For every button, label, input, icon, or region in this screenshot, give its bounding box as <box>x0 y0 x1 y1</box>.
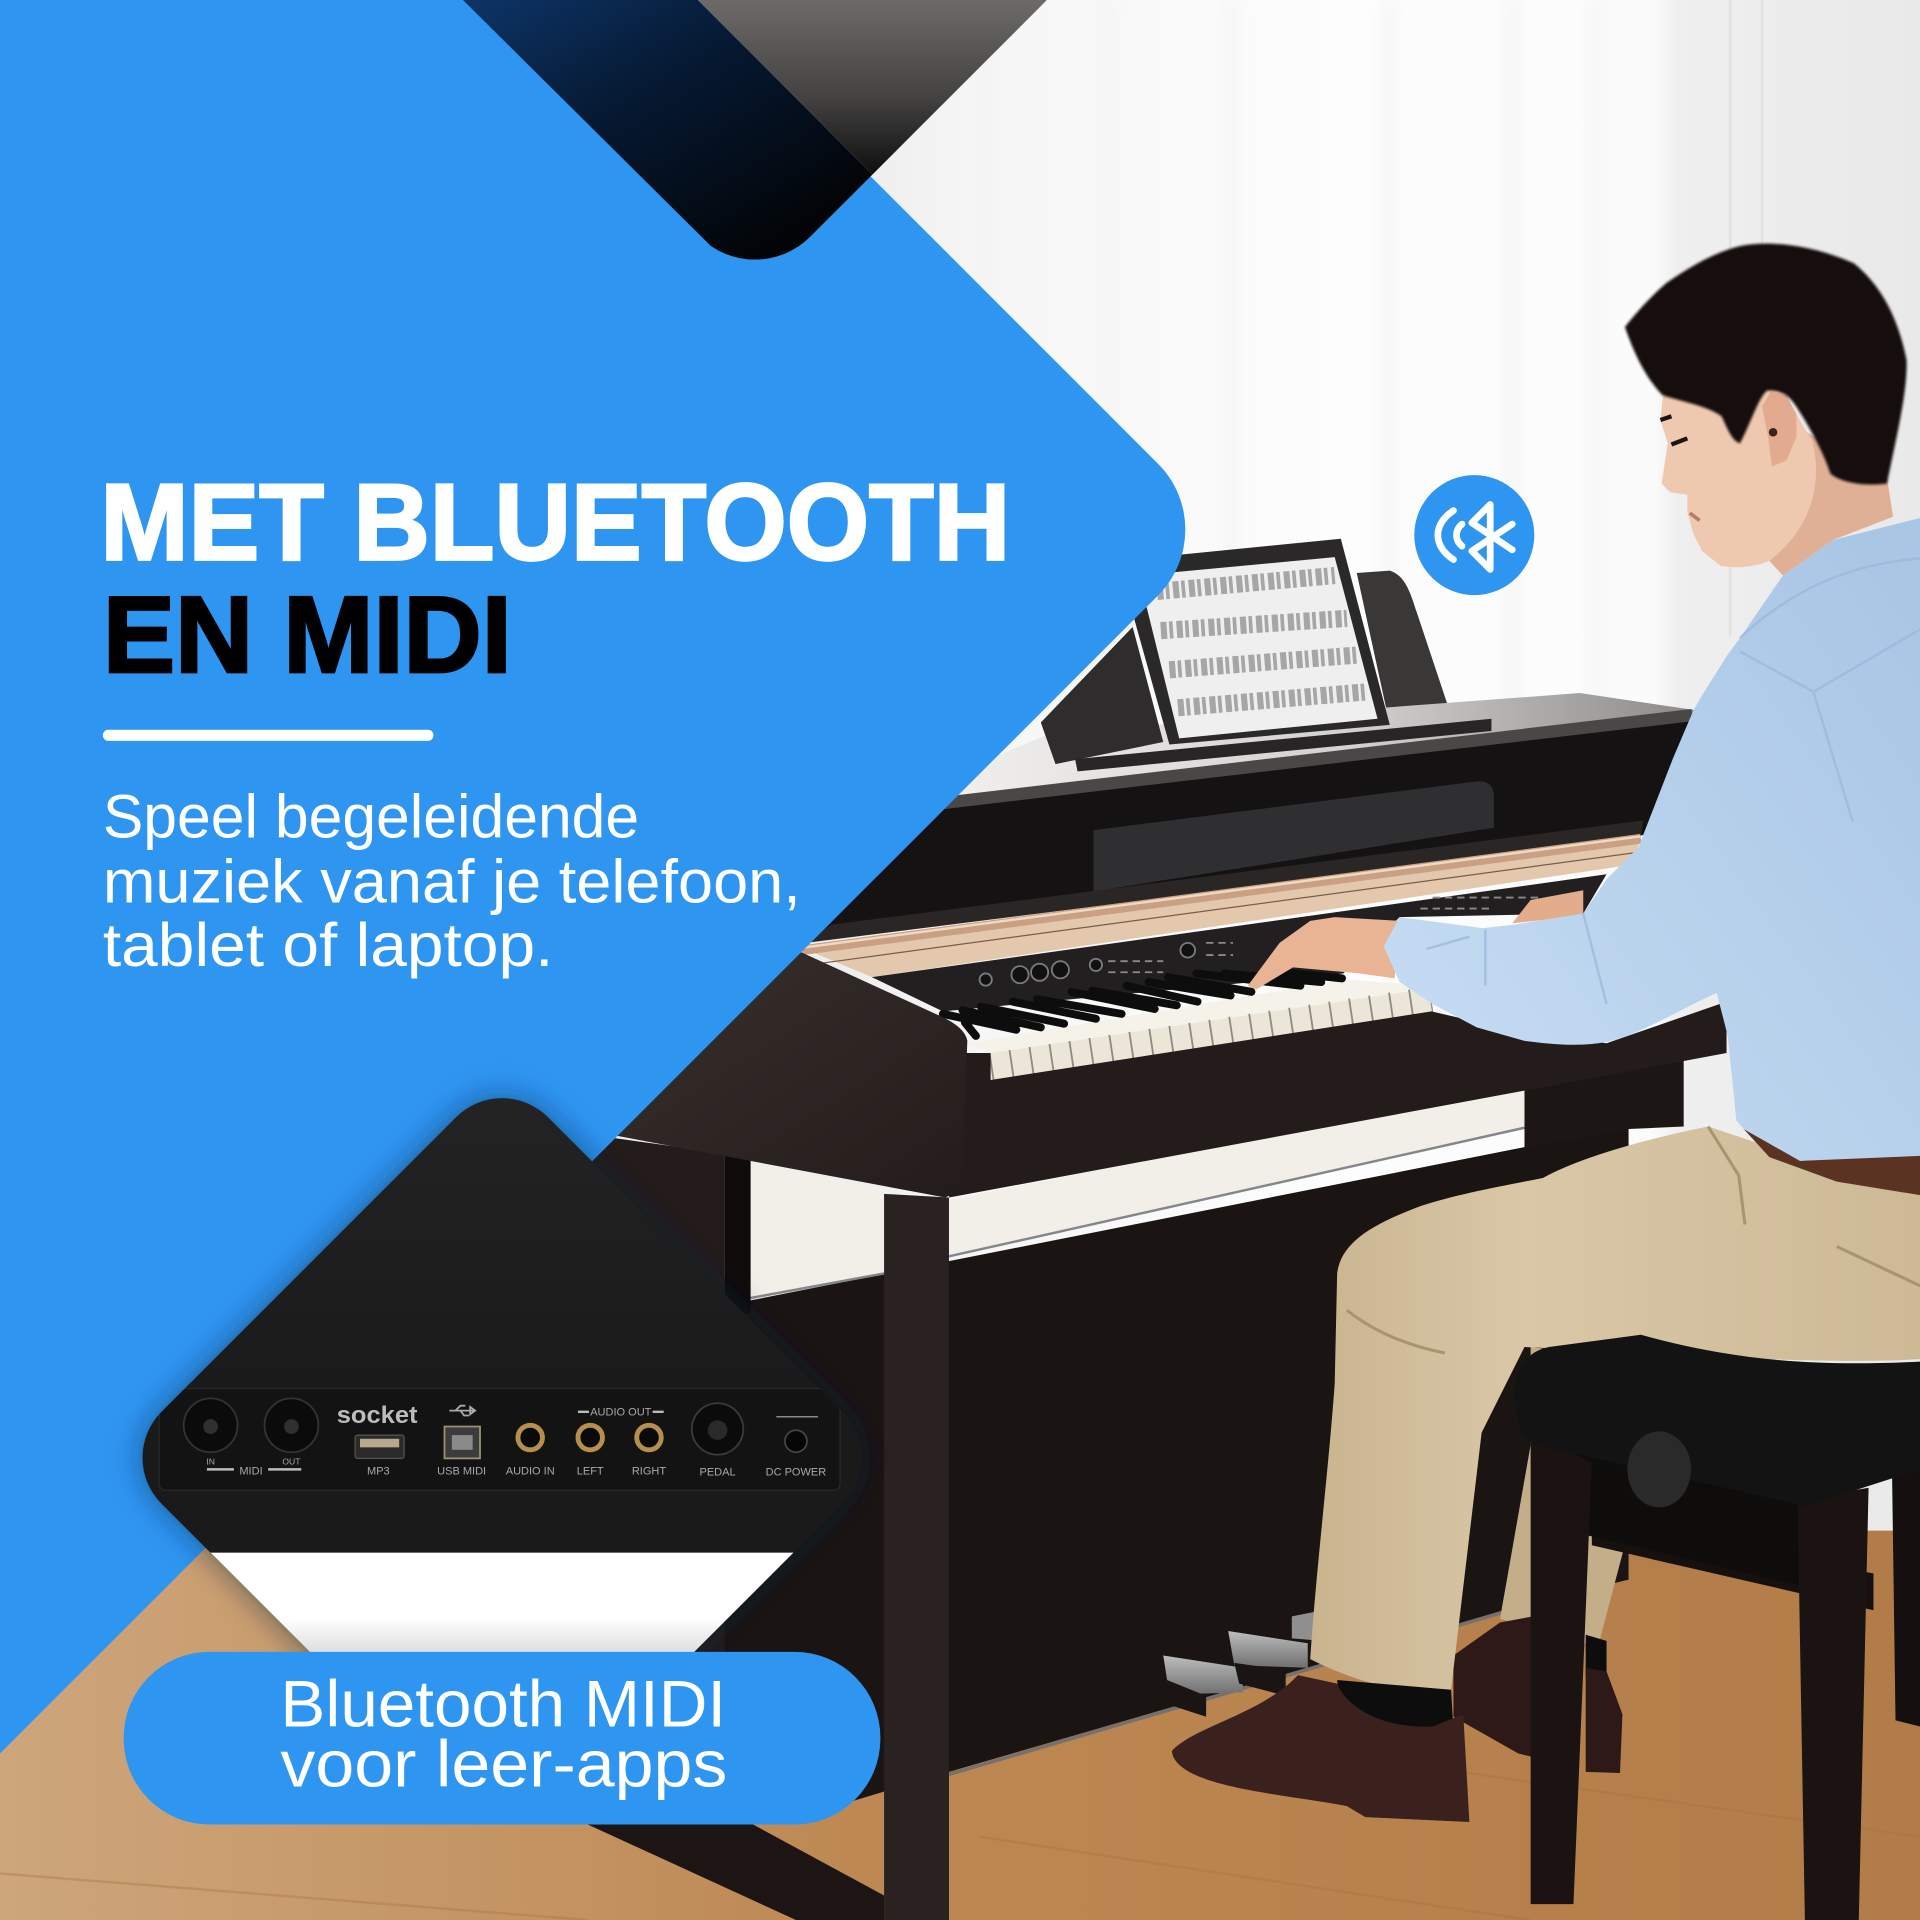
music stand ledge <box>1075 719 1491 771</box>
dark diamond at top <box>463 0 1047 260</box>
icon: bluetooth badge <box>1414 475 1534 595</box>
tablet with sheet music <box>1118 539 1390 744</box>
mouth <box>1690 513 1700 520</box>
description text: tablet of laptop. <box>103 911 553 979</box>
far sock <box>1586 1635 1607 1678</box>
ear <box>1762 392 1796 467</box>
piano side cheek <box>576 943 967 1198</box>
pedals <box>1161 1610 1322 1717</box>
piano foot rail <box>588 1824 884 1920</box>
neck <box>1714 429 1893 576</box>
ear canal <box>1769 428 1777 437</box>
face <box>1660 380 1816 567</box>
callout pill <box>124 1652 880 1824</box>
port labels: PEDAL <box>699 1467 736 1479</box>
port labels: MP3 <box>367 1465 390 1477</box>
near hand <box>1248 917 1400 989</box>
bench back leg <box>1892 1457 1920 1727</box>
bench seat <box>1515 1335 1920 1506</box>
pedal port <box>692 1403 743 1455</box>
diamond right half <box>698 0 1047 179</box>
piano body rear panel <box>576 1127 1629 1822</box>
panel knobs and buttons <box>980 898 1543 986</box>
front piano leg <box>884 1194 949 1920</box>
belt <box>1744 1129 1920 1195</box>
heading line one: MET BLUETOOTH <box>100 462 1010 584</box>
inset white floor <box>210 1552 794 1652</box>
MIDI label bars <box>207 1468 301 1470</box>
key slip rail <box>949 1002 1727 1198</box>
staff lines <box>1157 576 1367 708</box>
audio jacks <box>518 1425 661 1450</box>
lid front edge <box>931 715 1692 804</box>
bench knob <box>1627 1431 1691 1507</box>
port labels: AUDIO OUT <box>590 1407 652 1419</box>
socket logo: socket <box>337 1402 418 1429</box>
fallboard dark band <box>796 820 1643 944</box>
connector plate <box>159 1389 840 1490</box>
heading line two: EN MIDI <box>103 574 512 696</box>
near trouser leg and thigh <box>1310 1127 1920 1691</box>
gold strip separator <box>818 852 1638 964</box>
pianist <box>1172 244 1920 1822</box>
eye and brow <box>1660 416 1687 444</box>
black keys <box>943 971 1342 1036</box>
audio out dashes <box>578 1411 664 1413</box>
description text <box>103 783 801 979</box>
blue angled panel <box>0 0 1185 1753</box>
far hand <box>1512 890 1583 923</box>
inset wood top <box>188 1098 592 1386</box>
bench front leg left <box>1531 1435 1592 1904</box>
shirt torso and sleeve <box>1384 518 1920 1161</box>
inset diamond shadow <box>122 1078 865 1652</box>
near shoe <box>1172 1675 1469 1822</box>
shirt seams and folds <box>1427 558 1920 1004</box>
port labels: AUDIO IN <box>506 1465 555 1477</box>
port labels: OUT <box>282 1456 301 1466</box>
far trouser leg <box>1500 1347 1629 1647</box>
port labels: LEFT <box>577 1465 604 1477</box>
music stand back plate <box>1357 571 1452 725</box>
callout text line one: Bluetooth MIDI <box>280 1668 726 1742</box>
inner leg strip <box>725 1153 751 1313</box>
description text: Speel begeleidende <box>103 783 639 851</box>
USB symbol <box>449 1406 475 1416</box>
port labels: USB MIDI <box>437 1465 486 1477</box>
port labels: IN <box>206 1456 215 1466</box>
piano lid top <box>931 693 1696 798</box>
diamond left half <box>463 0 872 260</box>
port labels <box>206 1407 826 1479</box>
inset photo contents <box>142 1098 840 1652</box>
light edge of rear panel <box>751 1128 1524 1298</box>
control panel <box>872 874 1607 1011</box>
USB-A port <box>355 1435 404 1458</box>
trouser pocket and folds <box>1347 1127 1920 1353</box>
piano skirting highlight <box>949 1608 1518 1774</box>
port labels: DC POWER <box>766 1467 826 1479</box>
white key fronts <box>991 988 1431 1080</box>
bench rail <box>1592 1518 1873 1610</box>
speaker panel <box>1093 781 1494 891</box>
near sock <box>1337 1680 1453 1736</box>
MIDI in port <box>184 1398 238 1452</box>
wood floor <box>0 1531 1920 1920</box>
piano left side column <box>576 1133 725 1822</box>
port labels: MIDI <box>239 1465 263 1477</box>
white wall visible under the keyboard <box>751 1084 1524 1298</box>
rose gold highlight <box>802 836 1641 948</box>
USB-B port <box>444 1427 480 1458</box>
music stand left plate <box>1041 627 1163 764</box>
piano bench <box>1515 1335 1920 1920</box>
MIDI out port <box>264 1398 318 1452</box>
hair <box>1625 244 1907 485</box>
far shoe <box>1453 1616 1622 1773</box>
white keys top <box>967 980 1431 1080</box>
DC power port <box>776 1417 818 1452</box>
piano upper front <box>796 718 1693 931</box>
rose gold upper rod <box>802 839 1641 950</box>
heading rule <box>103 730 433 741</box>
description text: muziek vanaf je telefoon, <box>103 847 801 915</box>
inset lower band <box>142 1384 213 1555</box>
port labels: RIGHT <box>632 1465 666 1477</box>
bench front leg right <box>1798 1488 1869 1920</box>
bench apron <box>1567 1427 1800 1586</box>
right piano block and leg <box>1524 1053 1684 1149</box>
heading <box>100 462 1010 696</box>
rose gold strip base <box>802 836 1641 977</box>
callout text line two: voor leer-apps <box>280 1728 727 1802</box>
